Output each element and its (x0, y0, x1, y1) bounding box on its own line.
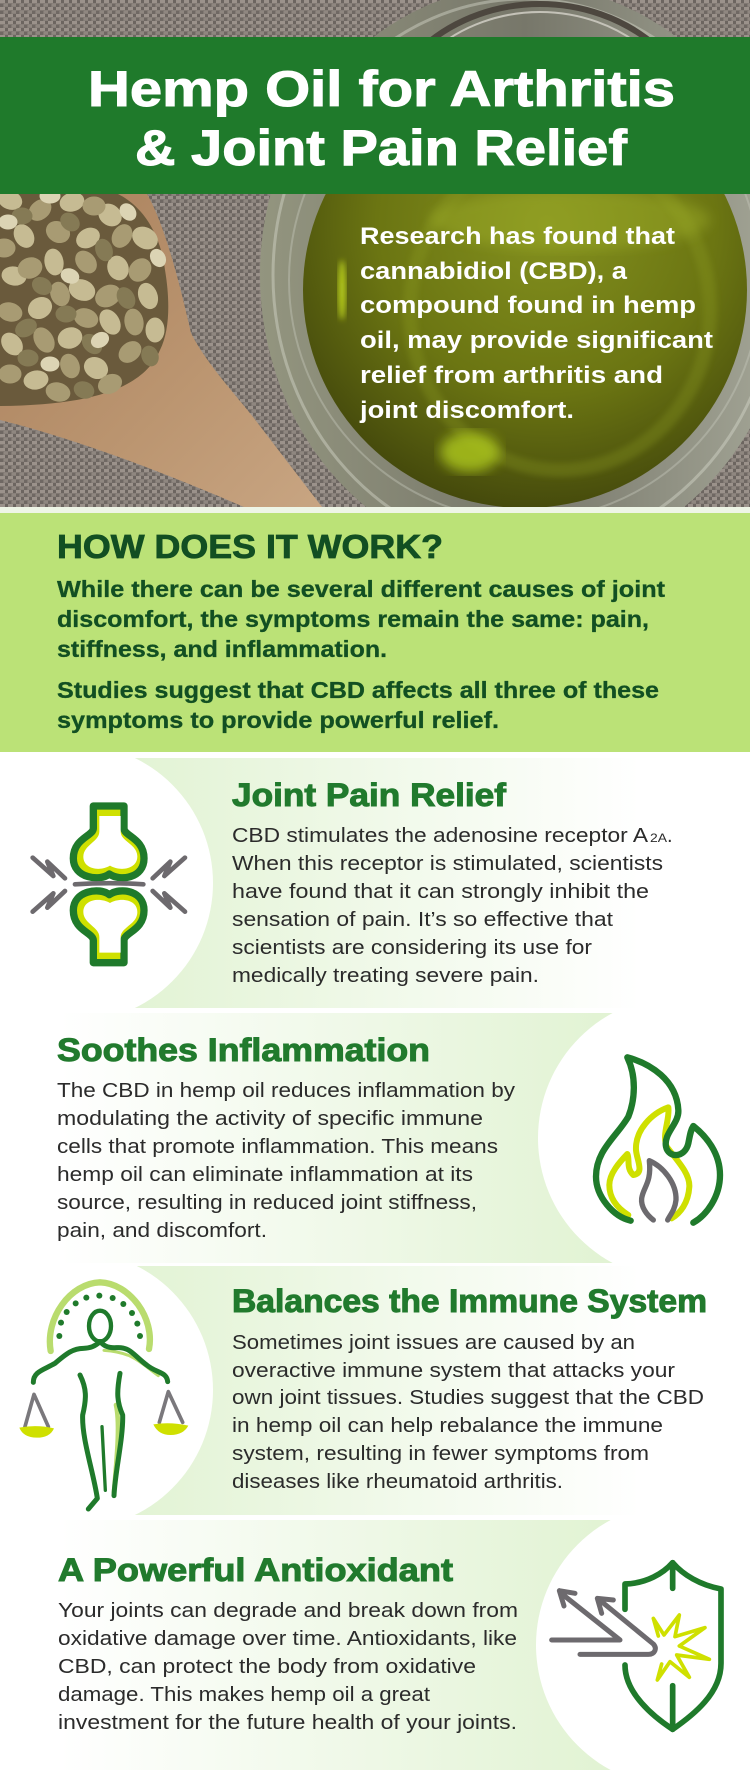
body text: a powerful antioxidant: CBD, can protect the body from oxidative (58, 1656, 476, 1678)
title banner (0, 37, 750, 194)
body text: balances the immune system (232, 1332, 704, 1493)
body text: joint pain relief: CBD stimulates the adenosine receptor A (232, 825, 649, 847)
icon: shield deflecting arrows (552, 1563, 721, 1729)
heading: balances the immune system: Balances the Immune System (232, 1283, 707, 1319)
wooden spoon (0, 170, 322, 507)
intro text: oil, may provide significant (360, 327, 713, 354)
title: Hemp Oil for Arthritis (88, 61, 675, 117)
intro text: cannabidiol (CBD), a (360, 258, 628, 285)
body text: a powerful antioxidant: oxidative damage over time. Antioxidants, like (58, 1628, 517, 1650)
body text: soothes inflammation: The CBD in hemp oil reduces inflammation by (57, 1080, 515, 1102)
body text: joint pain relief: have found that it can strongly inhibit the (232, 881, 649, 903)
body text: balances the immune system: in hemp oil can help rebalance the immune (232, 1415, 663, 1437)
photo: hemp seeds on wooden spoon and jar of oil (0, 0, 750, 507)
hemp seeds (0, 189, 167, 403)
body text: soothes inflammation: source, resulting in reduced joint stiffness, (57, 1192, 477, 1214)
body text: a powerful antioxidant: Your joints can degrade and break down from (58, 1600, 518, 1622)
title: & Joint Pain Relief (135, 120, 627, 176)
panel: balances the immune system (19, 1266, 706, 1515)
jar of hemp oil (260, 0, 750, 507)
body text: balances the immune system: own joint tissues. Studies suggest that the CBD (232, 1387, 704, 1409)
panel: a powerful antioxidant (58, 1520, 724, 1770)
body text: soothes inflammation (57, 1080, 515, 1242)
body text: soothes inflammation: modulating the activity of specific immune (57, 1108, 483, 1130)
body text: a powerful antioxidant (58, 1600, 518, 1734)
body text: joint pain relief (232, 825, 673, 987)
how it works text: symptoms to provide powerful relief. (57, 707, 499, 733)
body text: a powerful antioxidant: damage. This makes hemp oil a great (58, 1684, 430, 1706)
body text: joint pain relief: . (667, 825, 673, 847)
body text: balances the immune system: system, resulting in fewer symptoms from (232, 1443, 649, 1465)
icon: flame (596, 1057, 720, 1223)
intro text: Research has found that (360, 223, 675, 250)
body text: joint pain relief: When this receptor is stimulated, scientists (232, 853, 663, 875)
how it works text: discomfort, the symptoms remain the same: pain, (57, 606, 649, 632)
panel: how does it work (0, 513, 750, 752)
how it works text (57, 576, 665, 733)
icon: balanced body with scales (19, 1282, 188, 1509)
intro text: joint discomfort. (359, 397, 574, 424)
body text: balances the immune system: overactive immune system that attacks your (232, 1360, 675, 1382)
heading: a powerful antioxidant: A Powerful Antioxidant (58, 1552, 453, 1588)
body text: joint pain relief: medically treating severe pain. (232, 965, 539, 987)
intro text: relief from arthritis and (360, 362, 663, 389)
body text: soothes inflammation: hemp oil can eliminate inflammation at its (57, 1164, 473, 1186)
body text: joint pain relief: sensation of pain. It’s so effective that (232, 909, 613, 931)
body text: soothes inflammation: cells that promote inflammation. This means (57, 1136, 498, 1158)
intro text: compound found in hemp (360, 292, 696, 319)
icon: joint (33, 806, 185, 963)
heading: soothes inflammation: Soothes Inflammation (57, 1032, 430, 1068)
body text: balances the immune system: diseases like rheumatoid arthritis. (232, 1471, 563, 1493)
spoon bowl interior (0, 194, 168, 406)
intro text (359, 223, 713, 424)
how it works text: Studies suggest that CBD affects all three of these (57, 677, 659, 703)
panel: joint pain relief (30, 758, 671, 1008)
body text: joint pain relief: scientists are considering its use for (232, 937, 592, 959)
heading: joint pain relief: Joint Pain Relief (232, 777, 506, 813)
panel: soothes inflammation (57, 1013, 724, 1263)
body text: soothes inflammation: pain, and discomfort. (57, 1220, 267, 1242)
heading: how does it work: HOW DOES IT WORK? (57, 528, 443, 565)
pale strip under photo (0, 507, 750, 513)
body text: joint pain relief: 2A (650, 831, 667, 845)
how it works text: stiffness, and inflammation. (57, 636, 387, 662)
body text: balances the immune system: Sometimes joint issues are caused by an (232, 1332, 635, 1354)
how it works text: While there can be several different causes of joint (57, 576, 665, 602)
body text: a powerful antioxidant: investment for the future health of your joints. (58, 1712, 517, 1734)
title (88, 61, 675, 176)
